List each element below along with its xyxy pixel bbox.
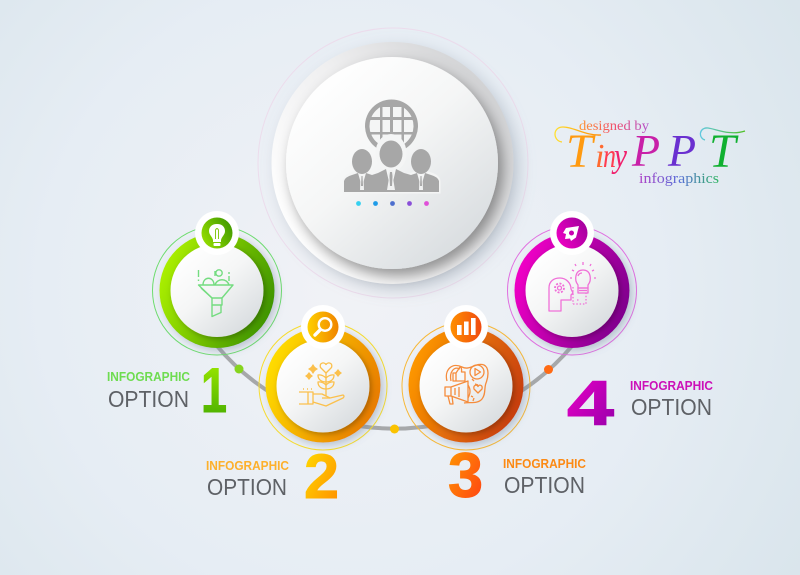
icon: light bulb (209, 224, 225, 246)
logo: designed by Tiny PPT infographics: T (566, 125, 596, 178)
label: option 1 (107, 356, 227, 426)
step 1 circle (152, 211, 282, 355)
label: option 2 (206, 442, 339, 512)
logo: designed by Tiny PPT infographics: n (603, 138, 616, 175)
label: option 2: INFOGRAPHIC (206, 459, 289, 473)
logo: designed by Tiny PPT infographics: P (631, 125, 660, 176)
label: option 3: 3 (448, 441, 483, 511)
icon: megaphone with social bubbles (445, 364, 488, 404)
icon: funnel (198, 270, 233, 316)
label: option 3: OPTION (504, 472, 585, 498)
connector dot orange (544, 365, 553, 374)
icon: head with gear and light bulb (549, 262, 596, 311)
logo: designed by Tiny PPT infographics: P (667, 125, 696, 176)
label: option 4: OPTION (631, 394, 712, 420)
connector dot green (234, 364, 244, 374)
label: option 1: INFOGRAPHIC (107, 370, 190, 384)
connector curve (217, 346, 572, 429)
logo: designed by Tiny PPT infographics: designed by (579, 119, 649, 134)
main hub circle (258, 28, 528, 298)
connector dot yellow (390, 424, 399, 434)
label: option 4: 4 (567, 369, 614, 439)
logo: designed by Tiny PPT infographics (555, 119, 745, 187)
label: option 3 (448, 441, 586, 511)
icon: hand and plant (299, 363, 344, 406)
label: option 1: OPTION (108, 386, 189, 412)
step 2 circle (259, 305, 387, 450)
logo: designed by Tiny PPT infographics: i (595, 138, 604, 175)
label: option 2: OPTION (207, 474, 287, 500)
logo: designed by Tiny PPT infographics: T (709, 125, 739, 178)
label: option 3: INFOGRAPHIC (503, 457, 586, 471)
icon: magnifier (315, 318, 331, 335)
label: option 4: INFOGRAPHIC (630, 379, 713, 393)
step 4 circle (508, 211, 636, 355)
indicator dots (356, 201, 429, 206)
label: option 4 (567, 369, 713, 439)
step 3 circle (402, 305, 530, 450)
label: option 1: 1 (201, 356, 227, 426)
logo: designed by Tiny PPT infographics: infographics (639, 171, 719, 187)
icon: rocket (563, 226, 579, 241)
icon: globe and business people (344, 100, 439, 192)
icon: bar chart (457, 318, 476, 335)
label: option 2: 2 (304, 442, 339, 512)
logo: designed by Tiny PPT infographics: y (611, 138, 628, 175)
